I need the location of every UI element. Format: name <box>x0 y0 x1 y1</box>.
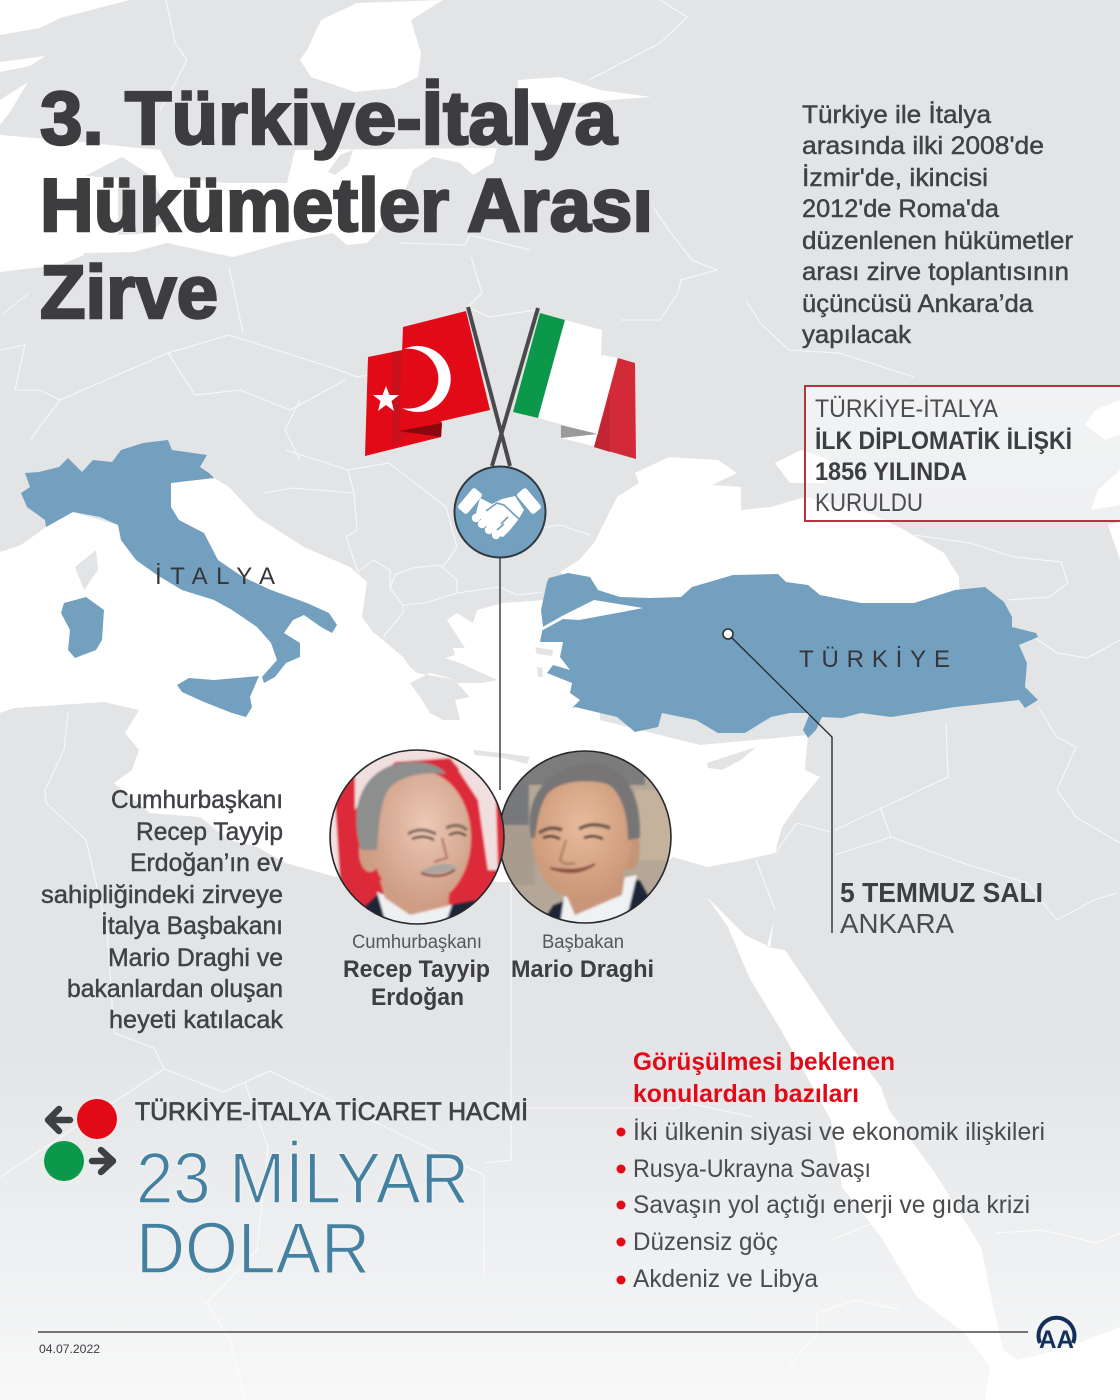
caption: Erdoğan: Cumhurbaşkanı <box>352 932 482 953</box>
summit text: sahipliğindeki zirveye <box>41 881 283 909</box>
Italian flag <box>513 313 636 459</box>
title <box>40 76 653 334</box>
caption: Erdoğan: Recep Tayyip <box>343 956 490 983</box>
flag poles <box>468 307 538 466</box>
Red Sea and Gulf of Aden <box>707 897 1120 1400</box>
icon: handshake <box>454 466 546 558</box>
intro text: yapılacak <box>802 321 912 349</box>
callout: first diplomatic relation <box>805 386 1120 521</box>
Mediterranean <box>0 478 820 882</box>
caption: Draghi: Başbakan <box>542 932 624 953</box>
callout: first diplomatic relation: İLK DİPLOMATİK İLİŞKİ <box>815 427 1072 455</box>
topics list: İki ülkenin siyasi ve ekonomik ilişkileri <box>633 1117 1045 1146</box>
trade volume: DOLAR <box>136 1209 370 1289</box>
icon: crossed flags <box>365 307 636 466</box>
Caspian <box>1085 400 1120 560</box>
caption: Erdoğan: Erdoğan <box>371 984 464 1011</box>
trade volume: 23 MİLYAR <box>136 1139 469 1219</box>
label: Türkiye: TÜRKİYE <box>799 646 950 673</box>
title: Zirve <box>40 250 218 334</box>
intro text: üçüncüsü Ankara’da <box>802 290 1033 318</box>
title: 3. Türkiye-İtalya <box>40 76 618 160</box>
trade volume <box>135 1097 528 1289</box>
callout: first diplomatic relation: KURULDU <box>815 489 923 517</box>
photo: Recep Tayyip Erdoğan <box>325 745 510 930</box>
caption: Erdoğan <box>343 932 490 1011</box>
date and place <box>840 877 1043 939</box>
date: 04.07.2022 <box>39 1342 100 1356</box>
photo frame: Mario Draghi <box>499 751 671 923</box>
date and place: ANKARA <box>840 908 955 939</box>
Sardinia <box>61 597 104 658</box>
summit text: Mario Draghi ve <box>108 944 283 972</box>
Black Sea and Azov <box>560 450 960 620</box>
intro text: Türkiye ile İtalya <box>802 100 991 129</box>
intro text: arasında ilki 2008'de <box>802 132 1044 160</box>
summit text: Erdoğan’ın ev <box>130 849 283 877</box>
connector: handshake to portraits <box>499 556 501 790</box>
Sea of Marmara and Dardanelles <box>541 600 643 630</box>
callout: first diplomatic relation: TÜRKİYE-İTALYA <box>815 394 998 423</box>
summit text: bakanlardan oluşan <box>67 975 283 1003</box>
Gulf of Bothnia and Gulf of Finland <box>300 0 651 105</box>
topics list: Düzensiz göç <box>633 1228 778 1256</box>
North Sea and Baltic <box>0 135 497 272</box>
summit text: heyeti katılacak <box>109 1006 283 1034</box>
topics list: Rusya-Ukrayna Savaşı <box>633 1155 871 1183</box>
title: Hükümetler Arası <box>40 163 653 247</box>
summit text: İtalya Başbakanı <box>101 911 283 940</box>
Corsica, Crete, Cyprus, Gotland, Jutland, Aegean islands <box>75 550 98 590</box>
topics heading: Görüşülmesi beklenen <box>633 1048 895 1076</box>
summit text: Cumhurbaşkanı <box>111 786 283 814</box>
callout: first diplomatic relation: 1856 YILINDA <box>815 458 967 486</box>
map: Italy <box>21 440 337 717</box>
label: İtalya: İTALYA <box>155 563 275 590</box>
intro text: İzmir'de, ikincisi <box>802 163 988 192</box>
connector: Ankara pin to date <box>723 629 832 933</box>
trade volume: TÜRKİYE-İTALYA TİCARET HACMİ <box>135 1097 528 1126</box>
footer rule <box>38 1331 1028 1333</box>
Turkish flag <box>365 311 490 456</box>
intro text: düzenlenen hükümetler <box>802 227 1073 255</box>
icon: AA logo: AA <box>1039 1326 1074 1354</box>
Norwegian coast fjords <box>0 0 130 125</box>
summit text <box>41 786 283 1034</box>
caption: Draghi: Mario Draghi <box>511 956 654 983</box>
Sicily <box>177 676 259 717</box>
map: Türkiye <box>540 573 1038 738</box>
date and place: 5 TEMMUZ SALI <box>840 877 1043 908</box>
intro text: 2012'de Roma'da <box>802 195 999 223</box>
intro text: arası zirve toplantısının <box>802 258 1069 286</box>
photo: Mario Draghi <box>502 752 670 922</box>
photo frame: Recep Tayyip Erdoğan <box>330 750 504 924</box>
topics heading: konulardan bazıları <box>633 1080 859 1108</box>
topics list <box>616 1117 1045 1293</box>
icon: trade arrows <box>44 1099 117 1181</box>
summit text: Recep Tayyip <box>136 818 283 846</box>
topics heading <box>633 1048 895 1108</box>
topics list: Savaşın yol açtığı enerji ve gıda krizi <box>633 1191 1030 1219</box>
caption: Draghi <box>511 932 654 983</box>
intro text <box>802 100 1073 349</box>
topics list: Akdeniz ve Libya <box>633 1265 818 1293</box>
